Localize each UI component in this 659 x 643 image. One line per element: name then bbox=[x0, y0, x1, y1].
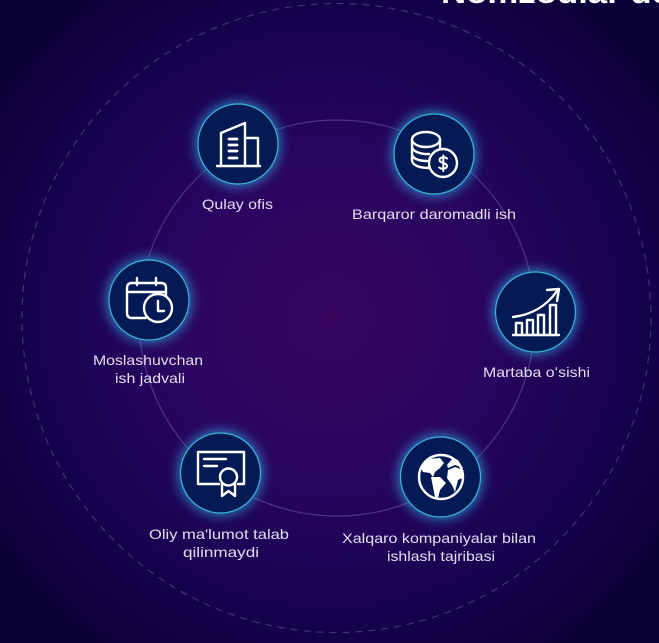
label: Xalqaro kompaniyalar bilan ishlash tajribasi: Xalqaro kompaniyalar bilan bbox=[342, 530, 536, 546]
item: Martaba o'sishi bbox=[483, 270, 590, 380]
item: Oliy ma'lumot talab qilinmaydi bbox=[149, 431, 289, 560]
icon: globe bbox=[419, 455, 464, 499]
icon: calendar with clock bbox=[127, 278, 172, 322]
label: Martaba o'sishi: Martaba oʻsishi bbox=[483, 364, 590, 380]
item: Moslashuvchan ish jadvali bbox=[93, 258, 203, 386]
label: Moslashuvchan ish jadvali: ish jadvali bbox=[115, 370, 185, 386]
label: Xalqaro kompaniyalar bilan ishlash tajribasi bbox=[342, 530, 536, 564]
label: Moslashuvchan ish jadvali: Moslashuvchan bbox=[93, 352, 203, 368]
label: Moslashuvchan ish jadvali bbox=[93, 352, 203, 386]
item: Qulay ofis bbox=[196, 102, 280, 212]
item: Xalqaro kompaniyalar bilan ishlash tajribasi bbox=[342, 435, 536, 564]
label: Oliy ma'lumot talab qilinmaydi: Oliy ma'lumot talab bbox=[149, 526, 289, 542]
label: Qulay ofis: Qulay ofis bbox=[202, 196, 273, 212]
label: Xalqaro kompaniyalar bilan ishlash tajribasi: ishlash tajribasi bbox=[387, 548, 495, 564]
item: Barqaror daromadli ish bbox=[352, 112, 516, 222]
label: Barqaror daromadli ish: Barqaror daromadli ish bbox=[352, 206, 516, 222]
label: Oliy ma'lumot talab qilinmaydi: qilinmaydi bbox=[183, 544, 259, 560]
icon: coins with dollar bbox=[412, 132, 457, 177]
label: Oliy ma'lumot talab qilinmaydi bbox=[149, 526, 289, 560]
inner circle bbox=[139, 120, 535, 516]
icon: office building bbox=[217, 123, 260, 166]
icon: growth chart bbox=[513, 289, 559, 335]
icon: certificate bbox=[198, 452, 244, 496]
